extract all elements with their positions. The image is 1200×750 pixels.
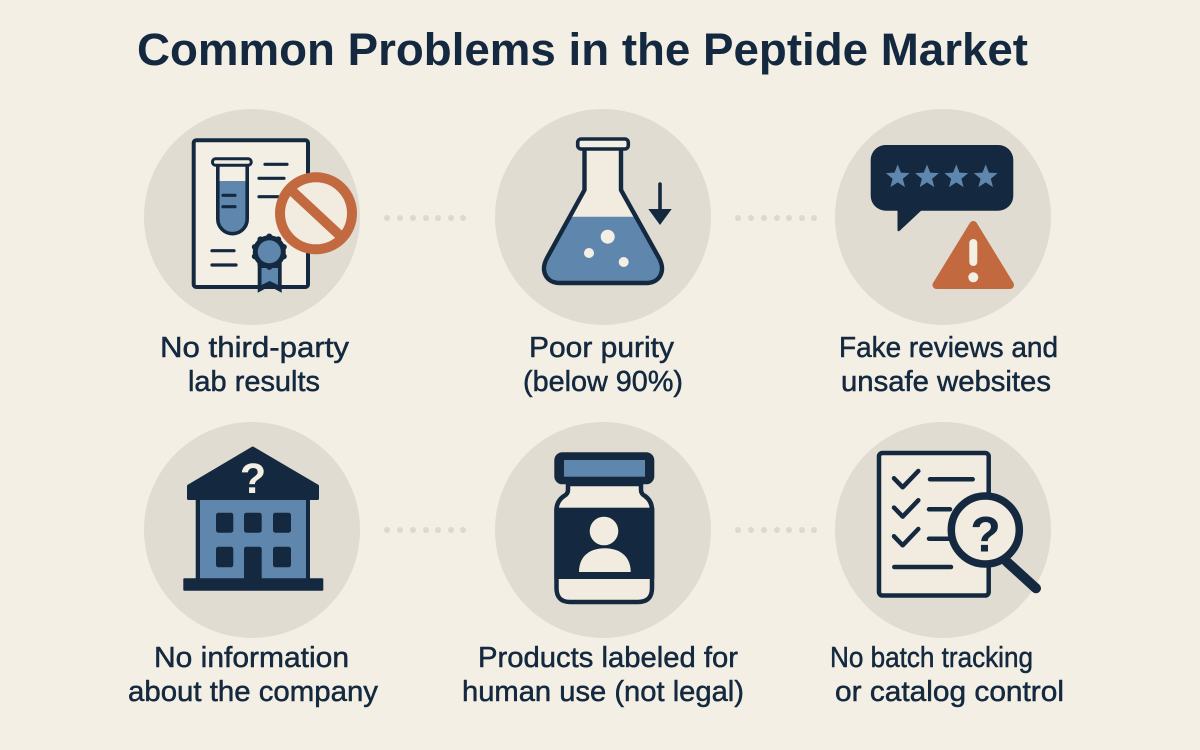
icon: lab certificate with prohibition sign (194, 140, 352, 293)
icon: checklist with magnifier (879, 453, 1036, 596)
panel: poor purity (495, 109, 711, 398)
label (160, 332, 350, 398)
label: about the company (128, 676, 379, 708)
label: No information (154, 642, 349, 674)
label: No batch tracking (830, 642, 1033, 674)
label: No third-party (160, 332, 350, 364)
panel: no batch tracking or catalog control (830, 422, 1064, 708)
icon: building with question mark: ? (240, 455, 266, 503)
title: Common Problems in the Peptide Market (137, 24, 1028, 75)
label: Poor purity (529, 332, 675, 364)
label: Products labeled for (478, 642, 738, 674)
label: or catalog control (835, 676, 1064, 708)
icon: checklist with magnifier: ? (970, 507, 1001, 563)
panel: fake reviews and unsafe websites (835, 109, 1058, 398)
icon: flask with down arrow (544, 139, 672, 283)
icon: jar with person label (554, 452, 654, 602)
label (128, 642, 379, 708)
label: human use (not legal) (462, 676, 744, 708)
label (462, 642, 744, 708)
label: Fake reviews and (839, 332, 1058, 364)
label (830, 642, 1064, 708)
icon: building with question mark (183, 448, 323, 591)
label: lab results (188, 366, 320, 398)
panel: products labeled for human use (462, 422, 744, 708)
label: (below 90%) (523, 366, 683, 398)
label (523, 332, 683, 398)
panel: no information about the company (128, 422, 379, 708)
label: unsafe websites (841, 366, 1051, 398)
label (839, 332, 1058, 398)
icon: star review bubble and warning triangle (871, 145, 1013, 285)
panel: no third-party lab results (144, 109, 360, 398)
